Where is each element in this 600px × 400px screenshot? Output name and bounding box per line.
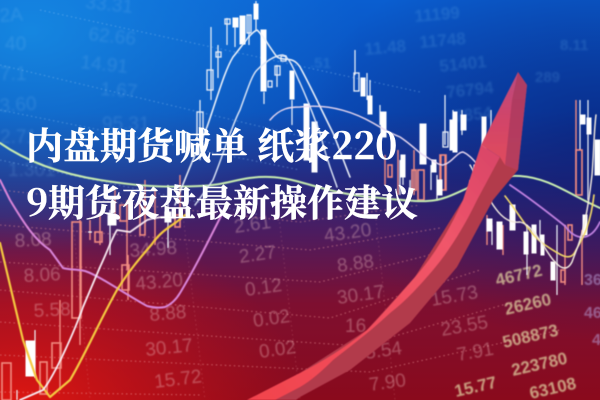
right blue numbers: 7854 [453,103,494,126]
beige volume numbers [453,261,578,400]
right purple numbers [584,272,600,349]
right blue numbers: 11199 [414,3,461,26]
white average line high [175,30,350,205]
pale lower numbers: 16 [345,316,366,337]
title line 1: 内盘期货喊单 纸浆220 [26,116,397,170]
pale yellow right line [505,195,594,257]
pale lower numbers: 0.12 [244,275,283,301]
blue numbers [0,0,150,181]
candlesticks: upper group [197,1,491,172]
right blue numbers: 76794 [445,78,495,102]
pale lower numbers: 8.06 [23,264,61,287]
right magenta line [510,185,600,237]
right blue numbers: 51401 [438,52,487,76]
pale lower numbers: 7.90 [368,370,407,396]
blue numbers: 7.1 [0,64,26,85]
white average line lower [20,217,175,400]
blue numbers: 2.71 [0,127,37,148]
candlesticks: lower-left red group [2,175,180,400]
pale lower numbers: 0.02 [258,337,297,363]
white-orange zig line [470,115,596,268]
pale lower numbers: 15.72 [153,366,203,393]
pale lower numbers: 2.27 [238,242,277,268]
pale lower numbers: 8.88 [149,302,187,326]
blue numbers: 1.67 [100,79,138,103]
beige volume numbers: 508873 [501,321,560,352]
blue numbers: 14.91 [79,52,129,78]
pale lower numbers: 8.88 [336,251,375,277]
blue numbers: 40 [5,34,26,55]
beige volume numbers: 26260 [503,290,553,319]
right blue numbers: 8.11 [560,37,588,54]
pale lower numbers: 30.17 [144,335,194,361]
arrow head right face [505,72,527,170]
magenta average line [0,180,225,308]
arrow head [481,72,527,170]
pale lower numbers: 30.17 [336,282,386,309]
pale lower numbers [14,212,495,396]
yellow average line [0,215,185,397]
pale lower numbers: 43.20 [323,220,373,247]
pale lower numbers: 8.08 [14,229,52,252]
title [26,116,418,227]
title line 2: 9期货夜盘最新操作建议 [26,173,418,227]
pale lower numbers: 15.73 [429,282,480,311]
pale lower numbers: 0.02 [252,306,291,332]
beige volume numbers: 46772 [494,261,544,290]
blue numbers: 1.301 [8,160,56,181]
candlesticks: middle group [385,150,490,200]
right blue numbers: 289 [535,69,560,86]
candlesticks: right group [487,100,600,295]
right blue numbers [310,3,588,126]
right blue numbers: 11748 [419,29,467,52]
green average line [0,143,600,208]
right blue numbers: 11.48 [364,36,407,59]
blue-white average line [195,55,337,205]
pale lower numbers: 7.91 [455,339,495,366]
right blue numbers: .51 [310,55,331,72]
rising red arrow [247,72,527,400]
pale lower numbers: 5.58 [33,299,71,322]
pale lower numbers: 34.98 [129,238,178,262]
blue numbers: 3.60 [0,93,37,117]
pale lower numbers: 5.54 [364,338,404,364]
lavender wave line [270,106,480,167]
arrow band bright face [247,145,500,400]
blue numbers: 95.31 [102,114,150,135]
arrow band lower shade [247,157,518,400]
pale lower numbers: 23.55 [439,312,490,341]
blue numbers: 62.66 [87,24,137,50]
pale lower numbers: 2.61 [233,212,272,238]
pale lower numbers: 43.20 [135,270,184,295]
beige volume numbers: 223780 [510,349,569,380]
